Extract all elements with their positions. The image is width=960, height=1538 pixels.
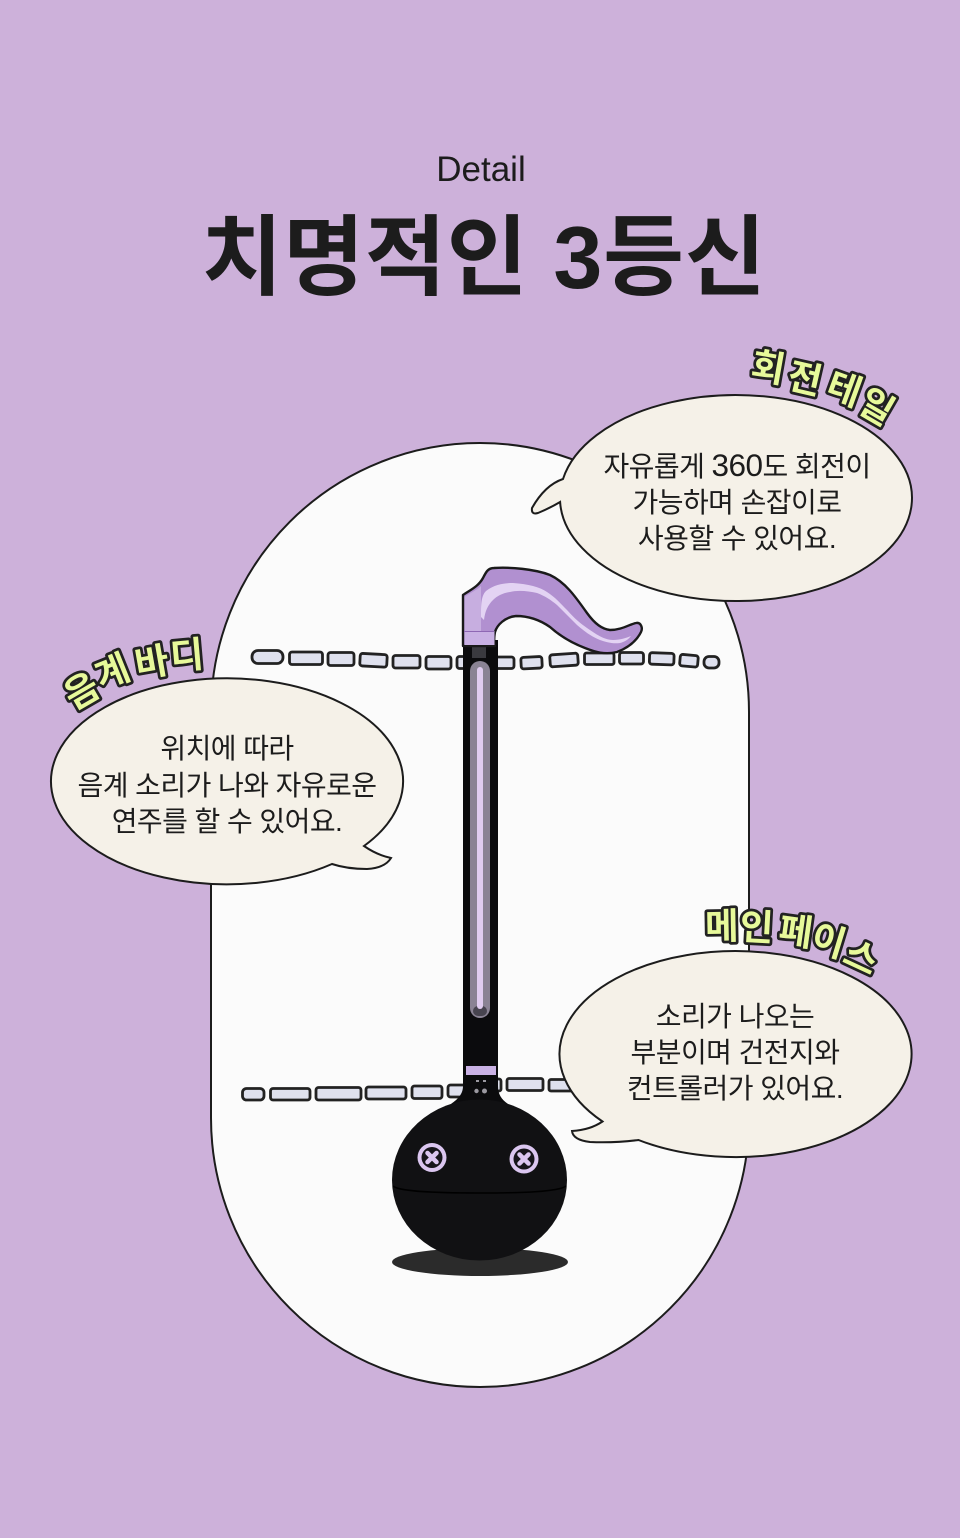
head highlight band [481,583,631,643]
label: 회전 테일: 전 [784,355,826,403]
label: 메인 페이스: 페 [776,909,815,954]
body text: 음계 소리가 나와 자유로운 [78,770,376,801]
callout: scale body [51,634,403,884]
label: 음계 바디: 디 [168,634,205,677]
body text: 컨트롤러가 있어요. [627,1073,843,1104]
bubble [532,395,912,601]
head collar [464,631,494,645]
stem [463,640,498,1085]
label: 메인 페이스: 인 [739,906,775,949]
callout: main face [560,906,912,1157]
body text: 위치에 따라 [160,733,294,764]
shadow [392,1248,568,1276]
body text: 사용할 수 있어요. [638,523,836,554]
body ball [392,1100,567,1260]
neck rivets [474,1080,487,1094]
body text: 가능하며 손잡이로 [633,487,841,518]
illustration: otamatone instrument [392,568,642,1276]
head [463,568,642,653]
icon: right eye button [510,1144,538,1174]
stem window [470,661,490,1018]
label: 회전 테일: 일 [851,381,901,433]
label: 회전 테일 [748,345,901,433]
title: 치명적인 3등신 [202,208,766,307]
head left strip [464,586,481,631]
bubble [51,678,403,884]
neck [451,1075,508,1104]
label: 음계 바디: 음 [57,665,107,717]
label: 메인 페이스: 이 [807,917,851,966]
label: 메인 페이스: 메 [705,906,739,947]
label: 회전 테일: 회 [748,345,788,391]
eyebrow: Detail: Detail [436,150,526,189]
label: 음계 바디 [57,634,205,717]
label: 음계 바디: 계 [89,647,136,698]
label: 메인 페이스 [705,906,885,983]
dashed line: bottom scale marker [242,1078,575,1100]
panel: white pill background [211,443,749,1387]
body text: 자유롭게 360도 회전이 [603,447,871,483]
seam [393,1186,566,1193]
icon: left eye button [418,1143,446,1172]
collar [466,1066,496,1079]
label: 회전 테일: 테 [821,364,867,414]
callout: rotating tail [532,345,912,601]
body text: 부분이며 건전지와 [631,1037,839,1068]
label: 메인 페이스: 스 [837,932,885,983]
label: 음계 바디: 바 [132,640,172,686]
body text: 연주를 할 수 있어요. [112,806,342,837]
stem upper window detail [472,647,486,658]
dashed line: top scale marker [252,650,719,669]
body text: 소리가 나오는 [656,1001,814,1032]
bubble [560,951,912,1157]
